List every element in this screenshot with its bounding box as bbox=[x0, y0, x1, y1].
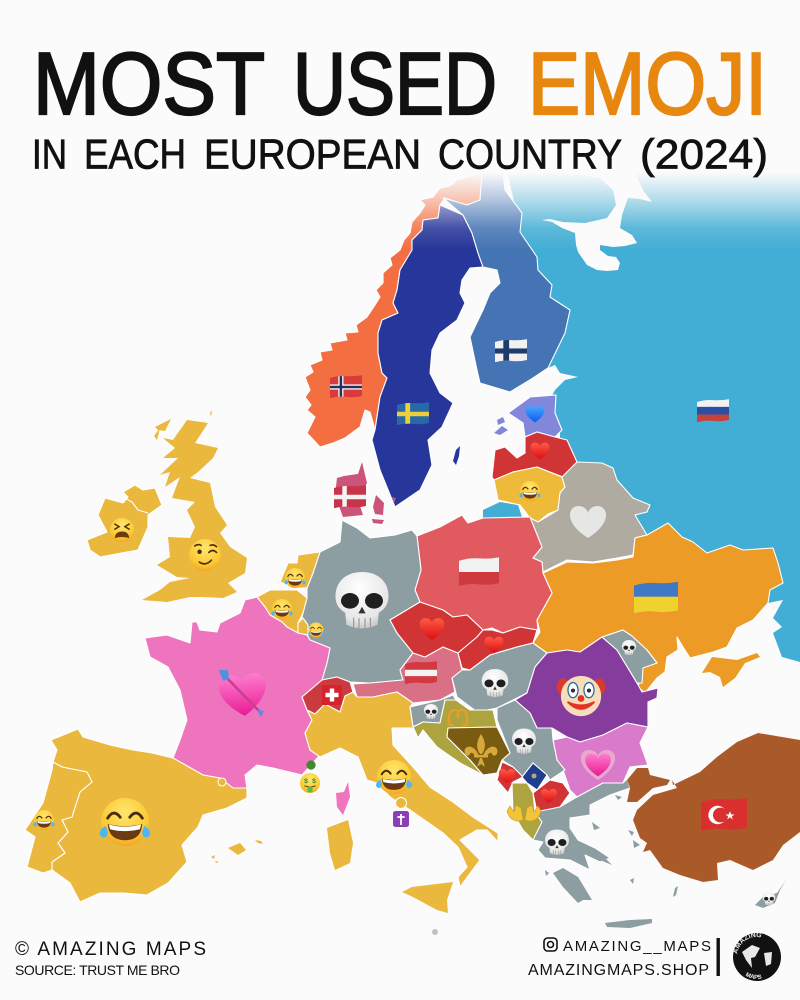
Malta bbox=[432, 929, 438, 935]
country: Kosovo bbox=[522, 763, 547, 790]
emoji: North Macedonia heart bbox=[541, 789, 557, 803]
emoji: Belarus white heart bbox=[570, 506, 606, 538]
country: Greece bbox=[533, 779, 678, 928]
emoji: Kosovo flag bbox=[532, 774, 536, 778]
Sardinia bbox=[327, 820, 353, 870]
emoji: Czechia heart bbox=[420, 618, 444, 640]
country: San Marino bbox=[396, 798, 406, 808]
country: Belgium bbox=[257, 590, 307, 633]
emoji: Montenegro heart bbox=[499, 769, 515, 783]
logo: AMAZING bbox=[733, 932, 762, 954]
country: Slovenia bbox=[410, 695, 456, 727]
emoji: France heart with arrow bbox=[218, 670, 268, 718]
emoji: Bulgaria pink heart bbox=[581, 750, 615, 780]
country: Russia bbox=[483, 150, 800, 662]
Balearic Islands bbox=[211, 840, 263, 863]
emoji: Germany skull bbox=[335, 572, 389, 629]
emoji: Monaco money face: $ bbox=[312, 778, 316, 785]
Instagram handle: AMAZING__MAPS bbox=[563, 938, 711, 955]
country: Portugal bbox=[25, 762, 92, 873]
source note: SOURCE: TRUST ME BRO bbox=[15, 962, 180, 978]
country: Germany bbox=[298, 520, 421, 683]
top fade overlay bbox=[0, 150, 800, 250]
country: Slovakia bbox=[458, 627, 537, 670]
emoji: Norway flag bbox=[330, 374, 362, 400]
country: Cyprus bbox=[755, 880, 786, 908]
country: Netherlands bbox=[280, 552, 320, 588]
Crimea bbox=[702, 653, 760, 687]
country: Monaco bbox=[306, 760, 316, 770]
country: Ireland bbox=[87, 485, 162, 557]
country: Estonia bbox=[494, 395, 562, 437]
emoji: Serbia skull bbox=[512, 728, 536, 754]
country: Italy bbox=[305, 692, 498, 887]
emoji: Russia flag bbox=[697, 398, 729, 424]
subtitle: (2024) bbox=[640, 130, 768, 178]
Gotland bbox=[453, 446, 460, 465]
emoji: Austria flag bbox=[405, 660, 437, 686]
logo: MAPS bbox=[746, 972, 762, 979]
title: MOST bbox=[33, 34, 265, 133]
subtitle: EUROPEAN bbox=[204, 130, 421, 178]
website: AMAZINGMAPS.SHOP bbox=[528, 962, 709, 979]
title: EMOJI bbox=[528, 34, 767, 133]
country: United Kingdom bbox=[142, 410, 247, 602]
emoji: Croatia heart hands bbox=[449, 710, 467, 725]
country: Austria bbox=[353, 647, 462, 703]
Sicily bbox=[402, 882, 453, 913]
country: France bbox=[145, 597, 330, 788]
footer credit: © AMAZING MAPS bbox=[15, 939, 206, 960]
emoji: Poland flag bbox=[459, 556, 499, 588]
emoji: Estonia blue heart bbox=[526, 406, 544, 422]
White Sea bbox=[520, 150, 652, 271]
country: Croatia bbox=[413, 700, 497, 775]
country: Latvia bbox=[492, 432, 577, 480]
map of Europe bbox=[25, 150, 800, 935]
country: Ukraine bbox=[533, 523, 783, 693]
Northern Ireland border bbox=[123, 497, 148, 513]
emoji: Lithuania laughing bbox=[519, 481, 541, 501]
country: Lithuania bbox=[494, 467, 565, 522]
emoji: Hungary skull bbox=[482, 669, 508, 698]
emoji: Monaco money face: $ bbox=[304, 778, 308, 785]
emoji: Slovenia skull bbox=[424, 704, 438, 719]
subtitle bbox=[32, 130, 768, 178]
emoji: Switzerland flag bbox=[322, 685, 342, 705]
emoji: Turkey flag bbox=[701, 798, 747, 831]
logo bbox=[733, 932, 781, 981]
emoji: Spain laughing bbox=[100, 798, 150, 846]
title: USED bbox=[293, 34, 497, 133]
emoji: Vatican latin cross bbox=[393, 811, 409, 827]
emoji: Belgium laughing bbox=[271, 599, 293, 619]
subtitle: IN bbox=[32, 130, 67, 178]
emoji: Denmark flag bbox=[334, 484, 366, 510]
country: Norway bbox=[305, 173, 482, 447]
country: Serbia bbox=[497, 700, 565, 780]
emoji: Cyprus skull bbox=[763, 892, 775, 905]
country: Bulgaria bbox=[553, 723, 648, 797]
title bbox=[33, 34, 767, 133]
country: Turkey bbox=[627, 733, 800, 882]
emoji: Luxembourg laughing bbox=[308, 622, 324, 638]
country: Montenegro bbox=[497, 762, 523, 793]
country: Spain bbox=[51, 729, 247, 902]
emoji: Ukraine flag bbox=[634, 580, 678, 616]
footer divider bbox=[716, 938, 720, 976]
country: Bosnia bbox=[447, 727, 510, 775]
emoji: UK winking face bbox=[189, 539, 221, 571]
emoji: Bosnia fleur-de-lis bbox=[465, 734, 497, 767]
country: Luxembourg bbox=[298, 618, 308, 635]
emoji: Moldova skull bbox=[622, 640, 636, 655]
country: Moldova bbox=[602, 630, 657, 683]
country: Albania bbox=[512, 783, 542, 840]
emoji: Italy laughing bbox=[376, 760, 412, 794]
country: Finland bbox=[443, 173, 570, 392]
emoji: Slovakia heart bbox=[485, 637, 503, 653]
country: Czechia bbox=[390, 602, 483, 657]
country: Hungary bbox=[452, 643, 547, 712]
emoji: Latvia red heart bbox=[531, 443, 549, 459]
emoji: Portugal laughing bbox=[33, 810, 55, 830]
country: Poland bbox=[415, 515, 552, 633]
subtitle: EACH bbox=[84, 130, 186, 178]
country: Denmark bbox=[335, 462, 396, 524]
emoji: Greece skull bbox=[545, 830, 569, 855]
country: Andorra bbox=[218, 778, 226, 786]
emoji: Ireland tired face bbox=[110, 518, 134, 542]
country: North Macedonia bbox=[533, 780, 570, 812]
icon: Instagram bbox=[544, 938, 557, 951]
country: Belarus bbox=[530, 462, 650, 572]
Corsica bbox=[336, 782, 350, 815]
emoji: Romania clown bbox=[557, 676, 605, 716]
emoji: Albania open hands bbox=[507, 805, 541, 821]
subtitle: COUNTRY bbox=[438, 130, 622, 178]
country: Romania bbox=[515, 637, 658, 742]
emoji: Netherlands laughing bbox=[284, 568, 306, 588]
country: Switzerland bbox=[302, 677, 353, 714]
emoji: Finland flag bbox=[495, 338, 527, 364]
emoji: Monaco money face bbox=[300, 773, 320, 793]
country: Sweden bbox=[372, 205, 483, 507]
emoji: Sweden flag bbox=[397, 401, 429, 427]
